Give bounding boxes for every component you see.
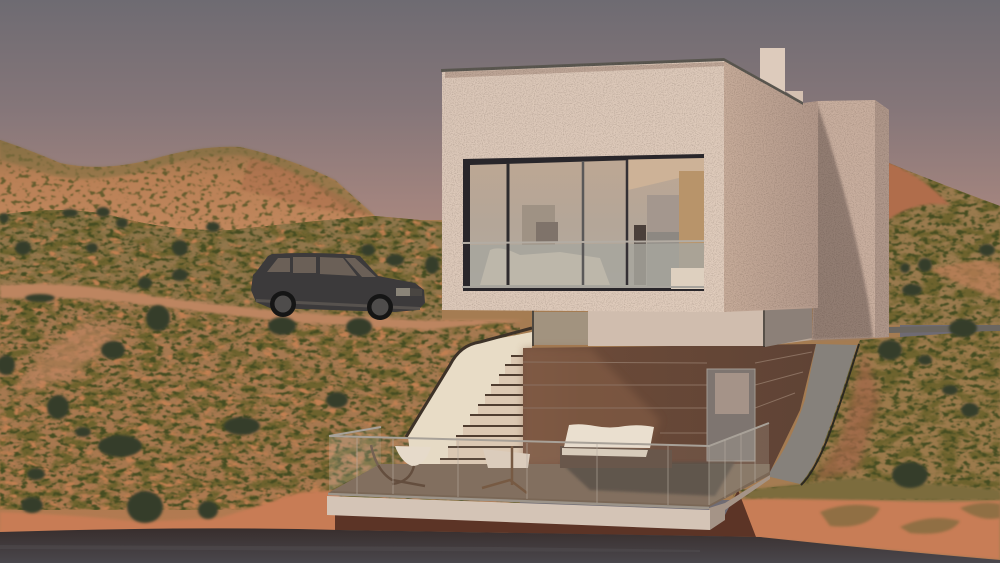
upper flight behind glass [532, 312, 590, 345]
roof edge [441, 58, 803, 105]
chair right [482, 446, 530, 493]
front wall [442, 59, 724, 312]
bushes [0, 207, 995, 523]
terrace [327, 423, 770, 530]
window [462, 155, 704, 291]
stair side wall [408, 332, 532, 470]
right hill [885, 160, 1000, 325]
foreground ground right [720, 330, 1000, 560]
slab front [327, 496, 710, 530]
deck floor [328, 464, 770, 507]
chimney [760, 48, 803, 103]
sky [0, 0, 1000, 240]
gravel ramp right [745, 344, 859, 485]
side wall [724, 59, 818, 312]
wall texture [440, 55, 890, 345]
water [0, 528, 1000, 563]
road right [889, 325, 1000, 333]
stair steps [440, 356, 525, 465]
car windows [267, 257, 376, 277]
mid hill left [0, 210, 442, 320]
tower [812, 100, 889, 340]
door [707, 369, 755, 461]
slab side [709, 475, 770, 530]
glass railing [329, 423, 769, 505]
chair left [371, 445, 431, 486]
back hill left [0, 140, 384, 230]
car [251, 253, 425, 320]
ground filler behind house [420, 220, 900, 500]
upper volume [440, 55, 890, 345]
car wheels [270, 291, 393, 320]
sofa [560, 424, 672, 468]
foreground ground left [0, 284, 525, 540]
undercroft volume and glass [533, 305, 812, 347]
staircase [406, 328, 532, 470]
shore shadow under terrace [335, 490, 756, 537]
brown lower wall [523, 344, 816, 472]
